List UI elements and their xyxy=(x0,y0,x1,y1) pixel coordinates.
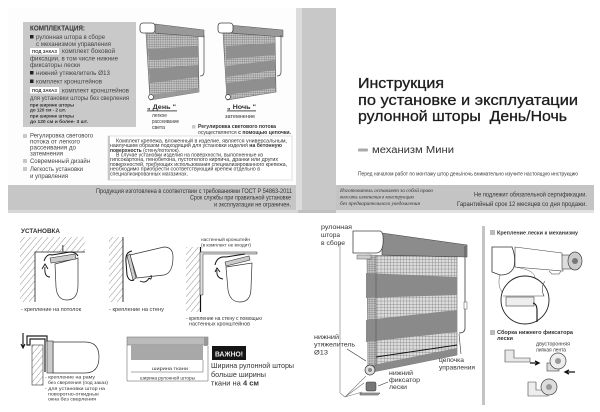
note: регулировка светового потока: Регулировка светового потока xyxy=(198,124,276,130)
footer: certification and warranty xyxy=(457,192,587,208)
title xyxy=(358,75,578,125)
label: frame mount: поворотно-откидные xyxy=(48,392,99,398)
footer text: standard and service life: и эксплуатации не ограничен. xyxy=(214,202,291,208)
callout: важно: больше ширины xyxy=(211,370,266,379)
list of kit contents: с механизмом управления xyxy=(36,41,112,48)
blind: день xyxy=(140,23,204,100)
diagram: line attachment xyxy=(492,247,582,324)
label: frame mount: окна без сверления xyxy=(48,396,96,402)
list of kit contents: ПОД ЗАКАЗ xyxy=(32,88,57,93)
footer text: standard and service life: Продукция изготовлена в соответствии с требованиями ГОСТ Р 54863-2011 xyxy=(96,189,293,195)
list of kit contents: рулонная штора в сборе xyxy=(36,33,105,41)
footer: manufacturer note: вносить изменения в конструкцию xyxy=(340,196,414,200)
title: рулонной шторы День/Ночь xyxy=(358,108,567,125)
footer text: standard and service life: Срок службы при правильной установке xyxy=(190,194,292,202)
feature list xyxy=(23,132,93,180)
list of kit contents: для установки шторы без сверления xyxy=(30,94,129,102)
list of kit contents: комплект кронштейнов xyxy=(62,86,130,94)
list of kit contents: ПОД ЗАКАЗ xyxy=(32,49,57,54)
bracket quantity note xyxy=(30,102,88,124)
list of kit contents xyxy=(30,33,130,102)
diagram: ceiling mount xyxy=(20,237,85,302)
footer text: standard and service life xyxy=(96,189,293,208)
bracket quantity note: до 120 см и более- 3 шт. xyxy=(30,119,88,124)
callout: важно xyxy=(211,346,294,388)
label: fabric width: ширина ткани xyxy=(152,367,188,372)
label: frame mount xyxy=(45,376,108,402)
mounting note box xyxy=(108,136,292,180)
label: frame mount: - для установки штор на xyxy=(45,387,105,392)
bracket quantity note: до 120 см - 2 шт. xyxy=(30,108,66,112)
labels: assembled blind: в сборе xyxy=(321,241,346,247)
label: wall bracket mount xyxy=(186,316,262,328)
labels: assembled blind: фиксатор xyxy=(389,378,421,384)
labels: assembled blind xyxy=(314,225,475,391)
instruction reminder: Перед началом работ по монтажу штор день/ночь внимательно изучите настоящую инструкцию xyxy=(358,172,578,178)
heading: lower retainer assembly: лески xyxy=(497,336,513,342)
footer: certification and warranty: Гарантийный срок 12 месяцев со дня продажи. xyxy=(457,201,587,208)
note: регулировка светового потока xyxy=(192,124,292,136)
feature list: потока от легкого xyxy=(30,138,80,146)
labels: assembled blind: нижний xyxy=(314,334,339,341)
feature list: затемнения xyxy=(30,150,64,158)
note: регулировка светового потока: осуществляется с помощью цепочки. xyxy=(198,130,292,136)
footer: manufacturer note: Изготовитель оставляет за собой право xyxy=(339,188,434,194)
diagram: wall mount xyxy=(109,237,173,302)
label: blind width: ширина рулонной шторы xyxy=(140,374,196,382)
mounting note box: специализированных магазинах. xyxy=(110,172,188,178)
labels: assembled blind: рулонная xyxy=(321,225,352,231)
label: frame mount: без сверления (под заказ) xyxy=(48,380,108,386)
mounting note box: поверхность (стену/потолок). xyxy=(110,148,180,154)
label: wall mount: - крепление на стену xyxy=(109,307,165,313)
list of kit contents: нижний утяжелитель Ø13 xyxy=(36,69,110,77)
label: день: рассеивание xyxy=(152,119,179,125)
diagram: lower retainer assembly xyxy=(505,350,575,396)
callout: важно: ВАЖНО! xyxy=(215,350,243,358)
label: wall bracket callout xyxy=(201,236,251,248)
list of kit contents: фиксации, в том числе нижние xyxy=(30,56,118,62)
footer: manufacturer note xyxy=(339,188,434,207)
label: день: света xyxy=(152,125,165,131)
labels: assembled blind: нижний xyxy=(389,370,413,377)
labels: assembled blind: утяжелитель xyxy=(314,342,355,348)
heading: lower retainer assembly xyxy=(490,329,573,342)
label: wall bracket callout: (в комплект не входит) xyxy=(201,242,251,248)
labels: assembled blind: штора xyxy=(321,233,341,239)
label: день: легкое xyxy=(152,113,167,119)
labels: assembled blind: цепочка xyxy=(439,358,465,364)
mounting note box: необходимо приобрести соответствующий крепеж отдельно в xyxy=(110,166,260,172)
label: wall bracket mount: настенных кронштейнов xyxy=(189,320,250,328)
bracket quantity note: при ширине шторы xyxy=(30,114,74,118)
labels: assembled blind: Ø13 xyxy=(314,350,329,356)
page backgrounds and grey bands xyxy=(8,8,594,213)
divider: right column xyxy=(482,226,485,405)
heading: line attachment: Крепление лески к механизму xyxy=(497,230,578,236)
subtitle: механизм мини: механизм Мини xyxy=(372,145,454,156)
footer: manufacturer note: без предварительного уведомления xyxy=(340,202,421,207)
list of kit contents: комплект кронштейнов xyxy=(36,78,103,86)
footer: certification and warranty: Не подлежит обязательной сертификации. xyxy=(474,192,587,198)
label: wall bracket mount: - крепление на стену с помощью xyxy=(186,316,262,322)
feature list: Регулировка светового xyxy=(30,132,93,140)
label: double-sided tape: двусторонняя xyxy=(536,342,570,348)
labels: assembled blind: управления xyxy=(439,366,475,372)
mounting note box: гипсокартона, пенобетона, пустотелого кирпича, дранки или других xyxy=(110,157,279,163)
title: по установке и эксплуатации xyxy=(358,92,578,109)
label: ночь xyxy=(225,104,256,120)
label: день: „ День " xyxy=(147,104,176,111)
callout: важно: Ширина рулонной шторы xyxy=(211,361,294,370)
list of kit contents: комплект боковой xyxy=(62,47,115,55)
feature list: рассеивания до xyxy=(30,144,76,152)
labels: assembled blind: лески xyxy=(389,385,407,391)
label: double-sided tape: липкая лента xyxy=(536,348,566,354)
mounting note box: Комплект крепежа, вложенный в изделие, является универсальным, xyxy=(116,138,287,144)
label: ночь: „ Ночь " xyxy=(227,104,256,111)
mounting note box: поверхностей, требующих использования специализированного крепежа, xyxy=(110,161,287,168)
title: Инструкция xyxy=(358,75,444,92)
panel: комплектация xyxy=(23,22,136,127)
list of kit contents: фиксаторы лески xyxy=(30,62,80,69)
diagram: assembled blind xyxy=(340,231,467,397)
heading: установка: УСТАНОВКА xyxy=(21,228,60,235)
feature list: Современный дизайн xyxy=(30,157,90,165)
feature list: Легкость установки xyxy=(30,166,83,173)
diagram: wall bracket mount xyxy=(186,247,257,312)
mounting note box: В случае установки изделия на поверхности, выполненные из xyxy=(116,152,264,158)
diagram: frame mount xyxy=(21,333,99,385)
blind: ночь xyxy=(218,23,283,100)
label: ceiling mount: - крепление на потолок xyxy=(21,307,82,313)
heading: lower retainer assembly: Сборка нижнего фиксатора xyxy=(497,329,573,336)
diagram: fabric and blind width xyxy=(127,337,208,382)
heading: комплектация: КОМПЛЕКТАЦИЯ: xyxy=(30,26,85,32)
callout: важно: ткани на 4 см xyxy=(211,378,259,388)
label: double-sided tape xyxy=(536,342,570,354)
label: wall bracket callout: настенный кронштейн xyxy=(201,236,250,242)
label: frame mount: - крепление на раму xyxy=(45,376,96,380)
label: день xyxy=(147,104,179,131)
feature list: и управления xyxy=(30,173,69,180)
label: ночь: затемнение xyxy=(225,114,255,120)
bracket quantity note: при ширине шторы xyxy=(30,102,74,108)
mounting note box: наилучшим образом подходящий для установки изделия на бетонную xyxy=(110,142,283,149)
